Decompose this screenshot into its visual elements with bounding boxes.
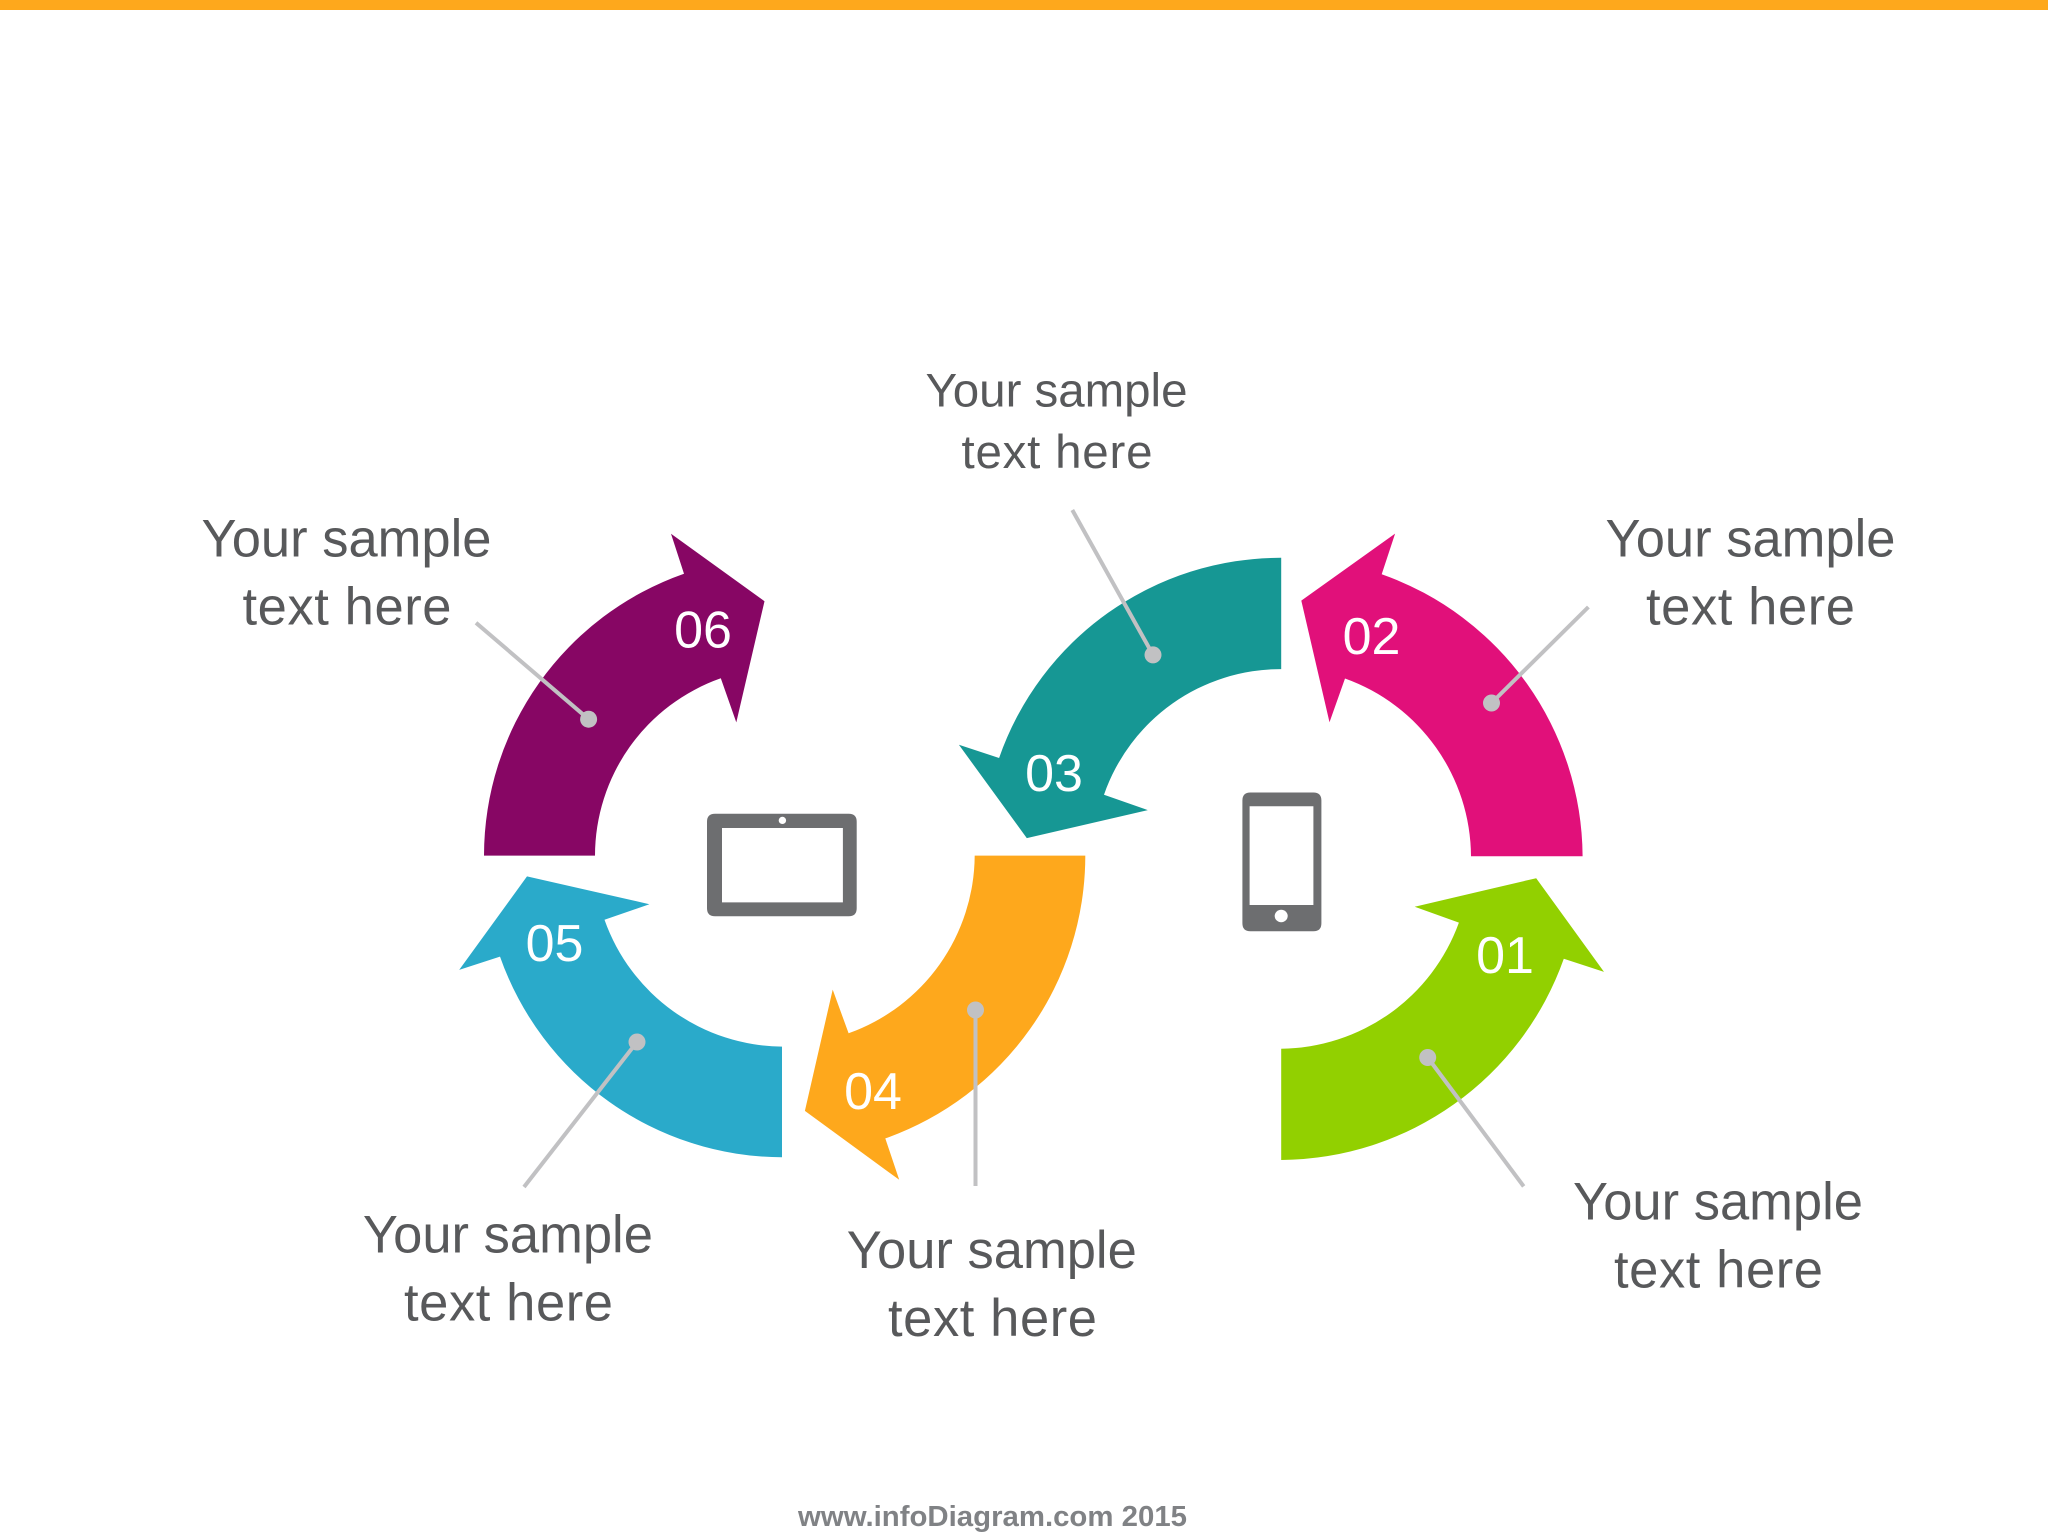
callout line 02 <box>1483 607 1588 712</box>
text label 03: Your sample <box>926 364 1188 418</box>
text label 04: text here <box>888 1289 1097 1348</box>
text label 02 <box>1606 510 1896 636</box>
icon: smartphone <box>1242 792 1321 931</box>
arrow 01: green <box>1281 878 1604 1160</box>
callout line 01 <box>1419 1049 1524 1186</box>
text label 06: text here <box>242 578 452 636</box>
text label 05 <box>363 1206 653 1332</box>
text label 01: text here <box>1614 1240 1823 1300</box>
text label 06: Your sample <box>202 510 492 568</box>
text label 06 <box>202 510 492 636</box>
arrow 02: pink: 02 <box>1343 608 1400 666</box>
text label 03 <box>926 364 1188 479</box>
callout line 04 <box>967 1002 984 1186</box>
callout line 06 <box>476 623 597 728</box>
arrow 05: blue <box>459 876 782 1157</box>
text label 05: text here <box>404 1274 613 1332</box>
text label 05: Your sample <box>363 1206 653 1264</box>
text label 01 <box>1573 1172 1863 1300</box>
text label 01: Your sample <box>1573 1172 1863 1232</box>
arrow 03: teal <box>959 558 1281 838</box>
arrow 02: pink <box>1301 534 1583 856</box>
text label 04: Your sample <box>847 1221 1137 1280</box>
arrow 03: teal: 03 <box>1025 745 1083 803</box>
text label 02: Your sample <box>1606 510 1896 568</box>
callout line 05 <box>524 1034 646 1187</box>
text label 04 <box>847 1221 1137 1348</box>
callout line 03 <box>1072 510 1162 663</box>
text label 02: text here <box>1646 578 1855 636</box>
arrow 04: orange: 04 <box>844 1063 902 1121</box>
icon: tablet <box>707 814 857 916</box>
footer credit: www.infoDiagram.com 2015 <box>797 1501 1187 1533</box>
arrow 01: green: 01 <box>1476 927 1534 985</box>
arrow 06: purple: 06 <box>674 602 732 660</box>
arrow 06: purple <box>484 534 764 856</box>
text label 03: text here <box>962 426 1152 479</box>
top accent bar <box>0 0 2048 10</box>
arrow 04: orange <box>805 856 1085 1180</box>
arrow 05: blue: 05 <box>526 915 583 973</box>
